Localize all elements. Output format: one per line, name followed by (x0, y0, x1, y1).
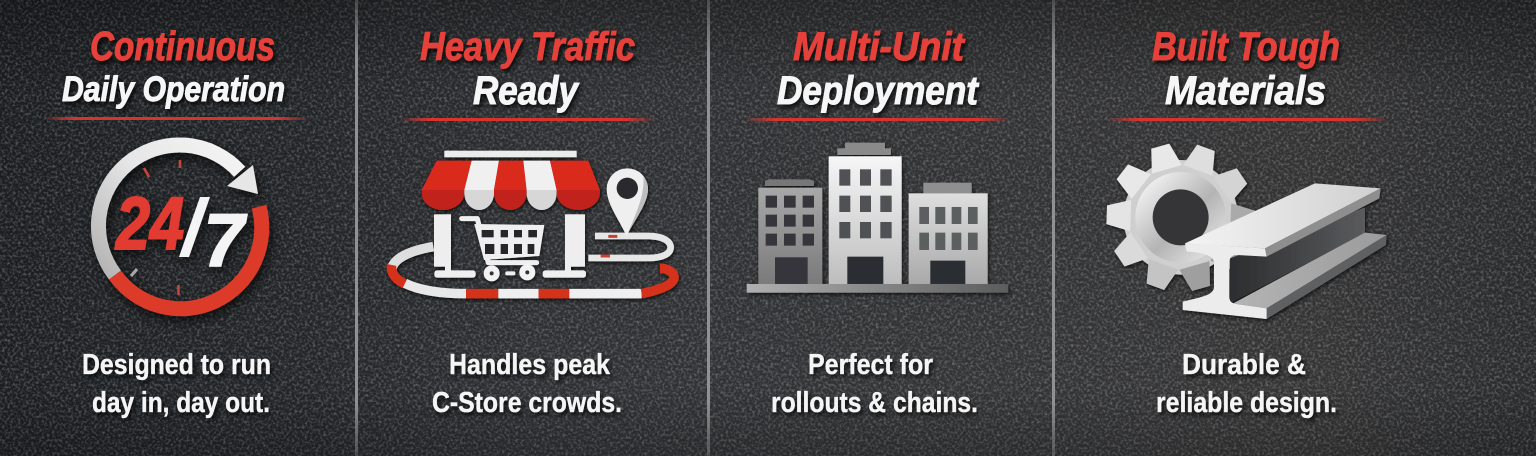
heading: multi-unit deployment: Multi-Unit (793, 25, 966, 69)
columns (434, 214, 451, 267)
text: handles peak (432, 349, 622, 419)
text: perfect for: Perfect for (808, 349, 933, 381)
base (747, 284, 1008, 293)
heading: heavy traffic ready: Ready (473, 69, 580, 113)
cart (462, 219, 544, 281)
left building (758, 179, 822, 284)
text: designed to run (82, 349, 271, 419)
heading: heavy traffic ready (420, 25, 635, 113)
steel beam (1183, 183, 1387, 319)
icon: 24/7 clock: 7 (204, 199, 248, 282)
text: perfect for: rollouts & chains. (771, 387, 978, 419)
text: durable &: reliable design. (1156, 387, 1337, 419)
icon: buildings (747, 143, 1008, 293)
awning (422, 161, 600, 210)
heading: multi-unit deployment: Deployment (777, 69, 979, 113)
heading: multi-unit deployment (777, 25, 979, 113)
text: handles peak: C-Store crowds. (432, 387, 622, 419)
middle building (829, 143, 902, 284)
text: handles peak: Handles peak (449, 349, 611, 381)
location pin (607, 168, 648, 237)
panel: heavy traffic ready (391, 25, 674, 419)
dividers (355, 0, 1055, 456)
top bar (444, 151, 577, 157)
text: durable &: Durable & (1182, 349, 1306, 381)
text: designed to run: day in, day out. (92, 387, 270, 419)
panel: built tough materials (1106, 25, 1388, 419)
heading: continuous daily operation (62, 23, 285, 109)
heading: continuous daily operation: Daily Operation (62, 70, 285, 109)
icon: storefront with cart (391, 151, 674, 294)
gear (1106, 142, 1255, 293)
heading: built tough materials: Materials (1165, 69, 1326, 113)
road (391, 236, 674, 294)
panel: multi-unit deployment (745, 25, 1010, 419)
right building (909, 183, 988, 284)
text: designed to run: Designed to run (82, 349, 271, 381)
text: perfect for (771, 349, 978, 419)
heading: heavy traffic ready: Heavy Traffic (420, 25, 635, 69)
panel: continuous daily operation (42, 23, 310, 419)
heading: continuous daily operation: Continuous (90, 23, 275, 69)
text: durable & (1156, 349, 1337, 419)
icon: 24/7 clock (98, 145, 262, 309)
icon: gear and steel beam (1106, 142, 1387, 319)
heading: built tough materials (1152, 25, 1340, 113)
heading: built tough materials: Built Tough (1152, 25, 1340, 69)
icon: 24/7 clock: 24 (114, 182, 184, 265)
